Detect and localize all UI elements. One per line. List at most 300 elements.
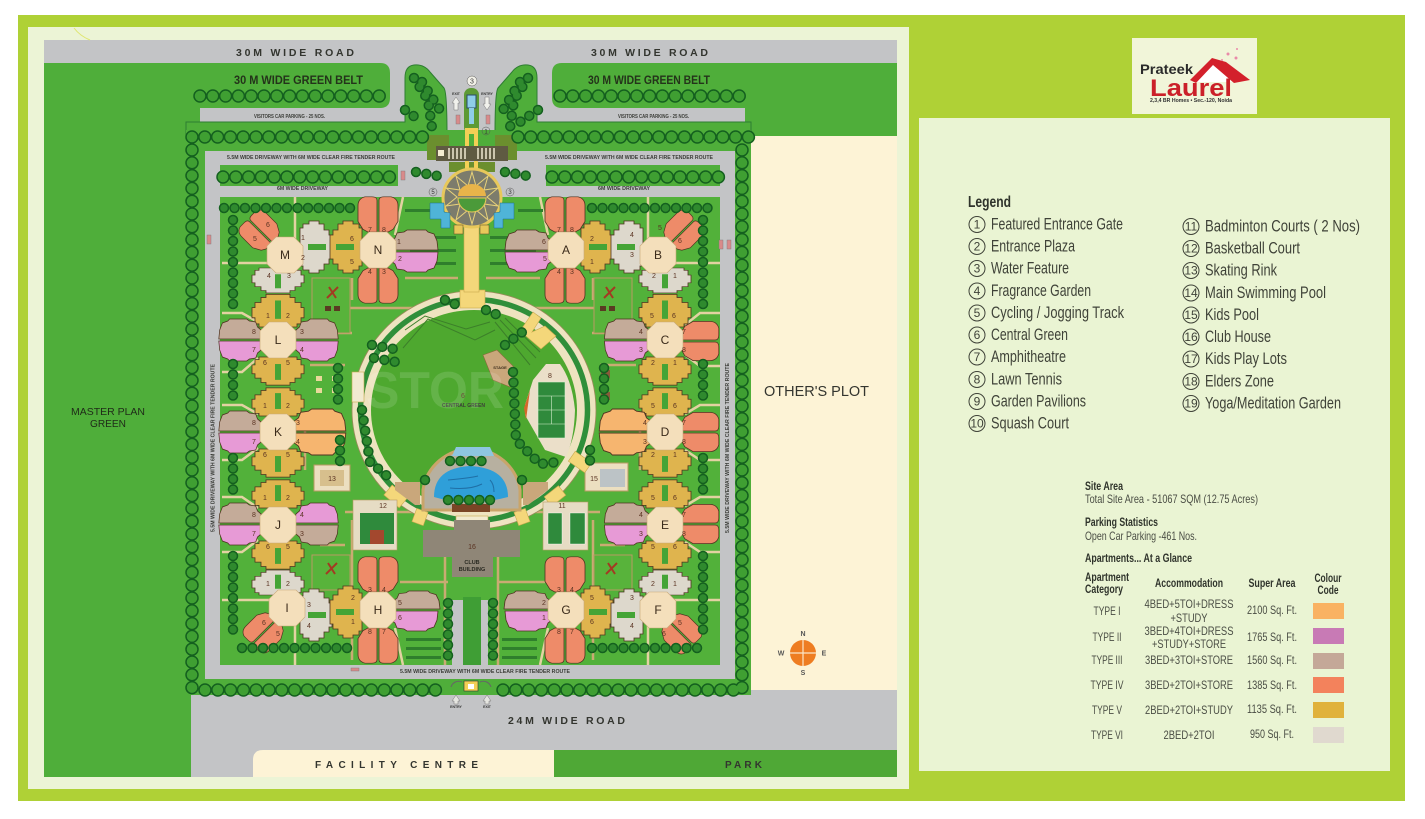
tower L: 1 [263,403,267,410]
left fragrance garden [312,278,350,333]
legend left column: Entrance Plaza [991,238,1076,256]
row: Type IV [1090,677,1344,693]
basketball court: 12 [379,503,387,510]
tower H: 8 [368,629,372,636]
tower N: 2 [398,256,402,263]
legend left column: 6 [974,328,981,342]
master plan green and left green belt [44,63,390,777]
tower N: 6 [350,236,354,243]
tower J: 6 [266,544,270,551]
bottom entry gate: EXIT [483,705,492,709]
tower B: 2 [652,273,656,280]
small trees: shadow [224,78,716,660]
number markers on plan: 5 [431,190,435,196]
tower J: 8 [252,512,256,519]
kids pool court [585,463,628,491]
legend left column: 5 [974,306,981,320]
lower right yoga garden [594,555,632,590]
tower H: 5 [398,600,402,607]
tower H: 1 [351,619,355,626]
legend left column: 1 [974,218,981,232]
corner curve [74,28,90,40]
tower F: 5 [678,620,682,627]
tower E: 7 [682,512,686,519]
compass: E [822,650,827,658]
legend left column: 4 [974,284,981,298]
tower J: 3 [300,531,304,538]
cycling and jogging track ring [352,291,596,529]
tower D: 1 [673,452,677,459]
row: Type II: 1765 Sq. Ft. [1247,630,1297,644]
tower J: 1 [266,581,270,588]
tower N: N [374,243,382,257]
legend left column: 8 [974,372,981,386]
legend left column: 3 [974,262,981,276]
track nodes [352,226,592,530]
tower N: 7 [368,227,372,234]
tower H: 6 [398,615,402,622]
club building: 16 [468,544,476,551]
tower F: 4 [630,623,634,630]
tower B: 4 [630,232,634,239]
road labels: 30M WIDE ROAD [236,47,354,59]
row: Type III [1092,653,1344,669]
central green label: CENTRAL GREEN [442,403,485,409]
tower J: 4 [300,512,304,519]
number markers on plan: 3 [508,190,512,196]
legend left column [969,216,1125,432]
lower left yoga garden [312,555,350,590]
legend right column: Basketball Court [1205,240,1300,258]
site boundary green [186,130,751,695]
tower N: 5 [350,259,354,266]
tower M [236,207,332,327]
right green belt [552,63,897,136]
tower B: 3 [630,252,634,259]
information panel [919,118,1390,771]
tower F: 6 [662,631,666,638]
tower E: 8 [682,531,686,538]
tower H: 3 [368,587,372,594]
elders zone left [316,376,338,393]
tower A: A [562,243,570,257]
tower I: 6 [262,620,266,627]
tower D: 2 [651,452,655,459]
parking statistics text [1085,515,1197,543]
tower I: I [285,601,289,615]
legend right column: Skating Rink [1205,262,1278,280]
tower M: 5 [253,236,257,243]
tower M: 6 [266,222,270,229]
tower D: 5 [651,495,655,502]
tower C: 3 [639,347,643,354]
legend left column: 10 [970,416,984,430]
tower J [219,503,338,595]
tower D: 4 [643,420,647,427]
club building [423,520,520,577]
stage label: STAGE [493,365,507,370]
row: Type IV: TYPE IV [1090,678,1124,692]
tower K: 8 [252,420,256,427]
legend left column: 2 [974,240,981,254]
facility centre band: FACILITY CENTRE [315,760,478,771]
compass: S [801,670,806,677]
number markers on plan [429,76,514,196]
road labels: 30 M WIDE GREEN BELT [588,75,710,87]
tower C: C [661,333,670,347]
tower E: 4 [639,512,643,519]
icon: kids play lot [326,563,337,574]
row: Type I: 2100 Sq. Ft. [1247,603,1297,617]
apartments heading: Apartments... At a Glance [1085,551,1192,565]
row: Type VI: 950 Sq. Ft. [1250,727,1294,741]
tower M: 1 [266,313,270,320]
table header: Apartment [1085,570,1129,584]
legend right column: 17 [1184,352,1198,366]
number markers on plan: 3 [470,78,474,86]
legend right column: Main Swimming Pool [1205,284,1326,302]
skating rink: 13 [328,476,336,483]
row: Type II: 3BED+4TOI+DRESS [1144,624,1234,638]
bottom entrance green strip [452,600,488,665]
road labels: VISITORS CAR PARKING - 25 NOS. [618,114,690,120]
legend left column: Fragrance Garden [991,282,1091,300]
tower B: 1 [673,273,677,280]
other's plot [751,136,897,690]
tower L: 6 [263,360,267,367]
row: Type III: 1560 Sq. Ft. [1247,653,1297,667]
legend right column: 13 [1184,264,1198,278]
tower F [611,589,705,657]
tower L: 8 [252,329,256,336]
legend left column: Cycling / Jogging Track [991,304,1125,322]
parking statistics text: Parking Statistics [1085,515,1158,529]
park band: PARK [725,760,763,771]
row: Type III: TYPE III [1092,653,1122,667]
table header: Category [1085,582,1123,596]
row: Type V: 1135 Sq. Ft. [1247,702,1297,716]
bottom entry gate [450,681,492,709]
tower C: 2 [651,360,655,367]
row: Type II: +STUDY+STORE [1152,637,1226,651]
tower J: 5 [286,544,290,551]
tower E: 5 [651,544,655,551]
tower I: 3 [307,602,311,609]
compass [778,631,827,677]
tower C: 8 [682,347,686,354]
logo: Prateek Laurel [1132,38,1257,114]
row: Type V: TYPE V [1092,703,1122,717]
road labels: 6M WIDE DRIVEWAY [598,186,651,192]
badminton courts [543,502,588,550]
logo: Prateek Laurel: 2,3,4 BR Homes • Sec.-120, Noida [1150,98,1232,104]
tower L: 5 [286,360,290,367]
tower D: 8 [682,439,686,446]
top entry and exit arrows: EXIT [452,92,461,96]
row: Type II: TYPE II [1092,630,1122,644]
legend left column: Amphitheatre [991,348,1066,366]
table header: Accommodation [1155,576,1223,590]
watermark: STOR [366,362,504,420]
legend left column: Garden Pavilions [991,392,1086,410]
park band [554,750,897,777]
central green lawn [371,310,577,510]
tower A: 7 [557,227,561,234]
tower B: 5 [650,313,654,320]
tower B: 6 [678,238,682,245]
tree rows: shadow [192,96,752,690]
tower I: 5 [276,631,280,638]
tower G [504,557,613,663]
tower N: 3 [382,269,386,276]
road labels: 5.5M WIDE DRIVEWAY WITH 6M WIDE CLEAR FIRE TENDER ROUTE [227,155,396,161]
road labels: 6M WIDE DRIVEWAY [277,186,329,192]
road labels: 24M WIDE ROAD [508,715,625,727]
left tree band [220,165,398,186]
row: Type I: TYPE I [1094,604,1120,618]
legend right column: 14 [1184,286,1198,300]
tower M: 3 [287,273,291,280]
tower K: 3 [296,420,300,427]
tower E: E [661,518,669,532]
road labels [210,47,731,727]
legend right column: 12 [1184,242,1198,256]
legend right column: Badminton Courts ( 2 Nos) [1205,218,1360,236]
tower D: 6 [673,495,677,502]
master plan green label: MASTER PLAN [71,406,145,418]
legend right column: 16 [1184,330,1198,344]
club building: CLUB [464,560,480,566]
main swimming pool [434,466,508,502]
tower L: L [275,333,282,347]
bottom entry gate: ENTRY [450,705,463,709]
row: Type I: 4BED+5TOI+DRESS [1144,597,1234,611]
master plan green label [71,406,145,430]
elders zone right [601,370,610,400]
tower E: 6 [673,544,677,551]
row: Type V [1092,702,1344,718]
pool terrace right [523,482,548,505]
row: Type IV: 3BED+2TOI+STORE [1145,678,1233,692]
row: Type VI: 2BED+2TOI [1164,728,1214,742]
swimming pool enclosure [423,447,520,512]
legend right column: 15 [1184,308,1198,322]
hedge strips beside main walk [404,209,543,659]
central green label [442,393,485,409]
tower N [330,197,438,303]
row: Type IV: 1385 Sq. Ft. [1247,678,1297,692]
site area text [1085,479,1258,506]
tower A: 4 [557,269,561,276]
skating rink [314,465,350,491]
legend left column: Squash Court [991,414,1069,432]
tower G: 5 [590,595,594,602]
master plan green label: GREEN [90,418,126,430]
legend right column: Club House [1205,328,1271,346]
facility centre band [253,750,554,777]
table header [1085,570,1342,597]
legend right column: 18 [1184,374,1198,388]
site area text: Site Area [1085,479,1123,493]
road labels: 30 M WIDE GREEN BELT [234,75,363,87]
tower M: M [280,248,290,262]
tower I: 4 [307,623,311,630]
tower C [604,319,719,416]
inner landscaped site [220,197,720,665]
tower G: 4 [570,587,574,594]
top entry and exit arrows: ENTRY [481,92,494,96]
tower K [219,409,346,508]
right entrance wedge [495,65,751,135]
top entry and exit arrows [452,92,494,110]
tower M: 2 [286,313,290,320]
road base [44,40,897,777]
legend left column: 7 [974,350,981,364]
road labels: 30M WIDE ROAD [591,47,708,59]
timber deck [452,504,490,512]
tower K: 7 [252,439,256,446]
basketball court [353,500,397,550]
entrance plaza sun medallion [443,169,501,227]
tower B [611,207,707,327]
compass: N [800,631,806,638]
tower A [505,197,613,303]
icon: garden pavilion [327,287,338,298]
tower A: 2 [590,236,594,243]
tower M: 4 [267,273,271,280]
logo: Prateek Laurel: Laurel [1150,75,1232,102]
tower G: 3 [557,587,561,594]
road labels: 5.5M WIDE DRIVEWAY WITH 6M WIDE CLEAR FIRE TENDER ROUTE [725,362,731,533]
legend right column [1183,218,1360,412]
tower A: 1 [590,259,594,266]
road labels: VISITORS CAR PARKING - 25 NOS. [254,114,326,120]
tower H: 2 [351,595,355,602]
pool terrace left [395,482,420,505]
small trees: canopy [224,78,716,660]
legend right column: Yoga/Meditation Garden [1205,394,1341,412]
tower C: 7 [682,329,686,336]
legend left column: Lawn Tennis [991,370,1062,388]
tower B: 5 [658,225,662,232]
legend left column: Central Green [991,326,1068,344]
tower J: J [275,518,281,532]
tower C: 4 [639,329,643,336]
tower I [240,589,332,656]
row: Type VI: TYPE VI [1091,728,1123,742]
tower D: D [661,425,670,439]
tower H: 7 [382,629,386,636]
club building: BUILDING [459,567,485,573]
tower E: 2 [651,581,655,588]
row: Type II [1092,624,1344,651]
beige internal paths [222,197,720,665]
legend right column: 19 [1184,396,1198,410]
driveway ring [205,151,735,679]
row: Type VI [1091,727,1344,743]
compass: W [778,650,785,658]
legend right column: Kids Play Lots [1205,350,1287,368]
tower C: 1 [673,360,677,367]
plaza squares [454,225,489,234]
tower L [219,319,338,416]
tower B: 6 [672,313,676,320]
tower H [330,557,440,663]
badminton courts: 11 [558,503,566,510]
legend title: Legend [968,194,1011,211]
tower K: 2 [286,495,290,502]
entrance water feature [464,88,479,134]
tower H: H [374,603,382,617]
entrance olive plaza [427,135,517,172]
legend left column: Featured Entrance Gate [991,216,1123,234]
left entrance wedge [186,65,447,135]
lawn tennis court: 8 [548,373,552,380]
site plan panel [28,27,909,789]
tower J: 7 [252,531,256,538]
car icons [207,115,731,671]
central green label: 6 [461,393,465,400]
tower C: 6 [673,403,677,410]
tower K: 4 [296,439,300,446]
amphitheatre lines [403,316,540,365]
brown paved walks [305,278,640,665]
table header: Super Area [1248,576,1296,590]
entrance gate [436,128,508,170]
road labels: 5.5M WIDE DRIVEWAY WITH 6M WIDE CLEAR FIRE TENDER ROUTE [545,155,714,161]
tower M: 1 [301,235,305,242]
row: Type III: 3BED+3TOI+STORE [1145,653,1233,667]
tower C: 5 [651,403,655,410]
logo: Prateek Laurel: Prateek [1140,61,1193,77]
tower B: B [654,248,662,262]
other's plot label: OTHER'S PLOT [764,384,869,400]
tree rows: canopy [192,96,752,690]
icon: kids play lot right [606,563,617,574]
right tree band [546,165,720,186]
tower D: 3 [643,439,647,446]
table header: Code [1318,583,1339,597]
stage [483,350,517,387]
tower D [599,409,719,508]
road labels: 5.5M WIDE DRIVEWAY WITH 6M WIDE CLEAR FIRE TENDER ROUTE [400,669,571,675]
tower N: 4 [368,269,372,276]
table header: Colour [1314,571,1342,585]
tower N: 1 [397,239,401,246]
tower M: 2 [301,255,305,262]
tower E [604,503,719,595]
tower H: 4 [382,587,386,594]
tower L: 7 [252,347,256,354]
legend right column: 11 [1185,220,1198,234]
legend right column: Kids Pool [1205,306,1259,324]
legend right column: Elders Zone [1205,372,1274,390]
tower F: F [654,603,662,617]
road labels: 5.5M WIDE DRIVEWAY WITH 6M WIDE CLEAR FIRE TENDER ROUTE [210,363,216,532]
number markers on plan: 1 [484,130,488,136]
tower A: 8 [570,227,574,234]
tower A: 6 [542,239,546,246]
tower L: 2 [286,403,290,410]
tower L: 4 [300,347,304,354]
tower L: 3 [300,329,304,336]
apartments table [1085,570,1344,743]
icon: house roof [1190,48,1250,83]
row: Type I [1094,597,1344,625]
tower E: 3 [639,531,643,538]
row: Type V: 2BED+2TOI+STUDY [1145,703,1233,717]
right fragrance garden [594,278,632,333]
